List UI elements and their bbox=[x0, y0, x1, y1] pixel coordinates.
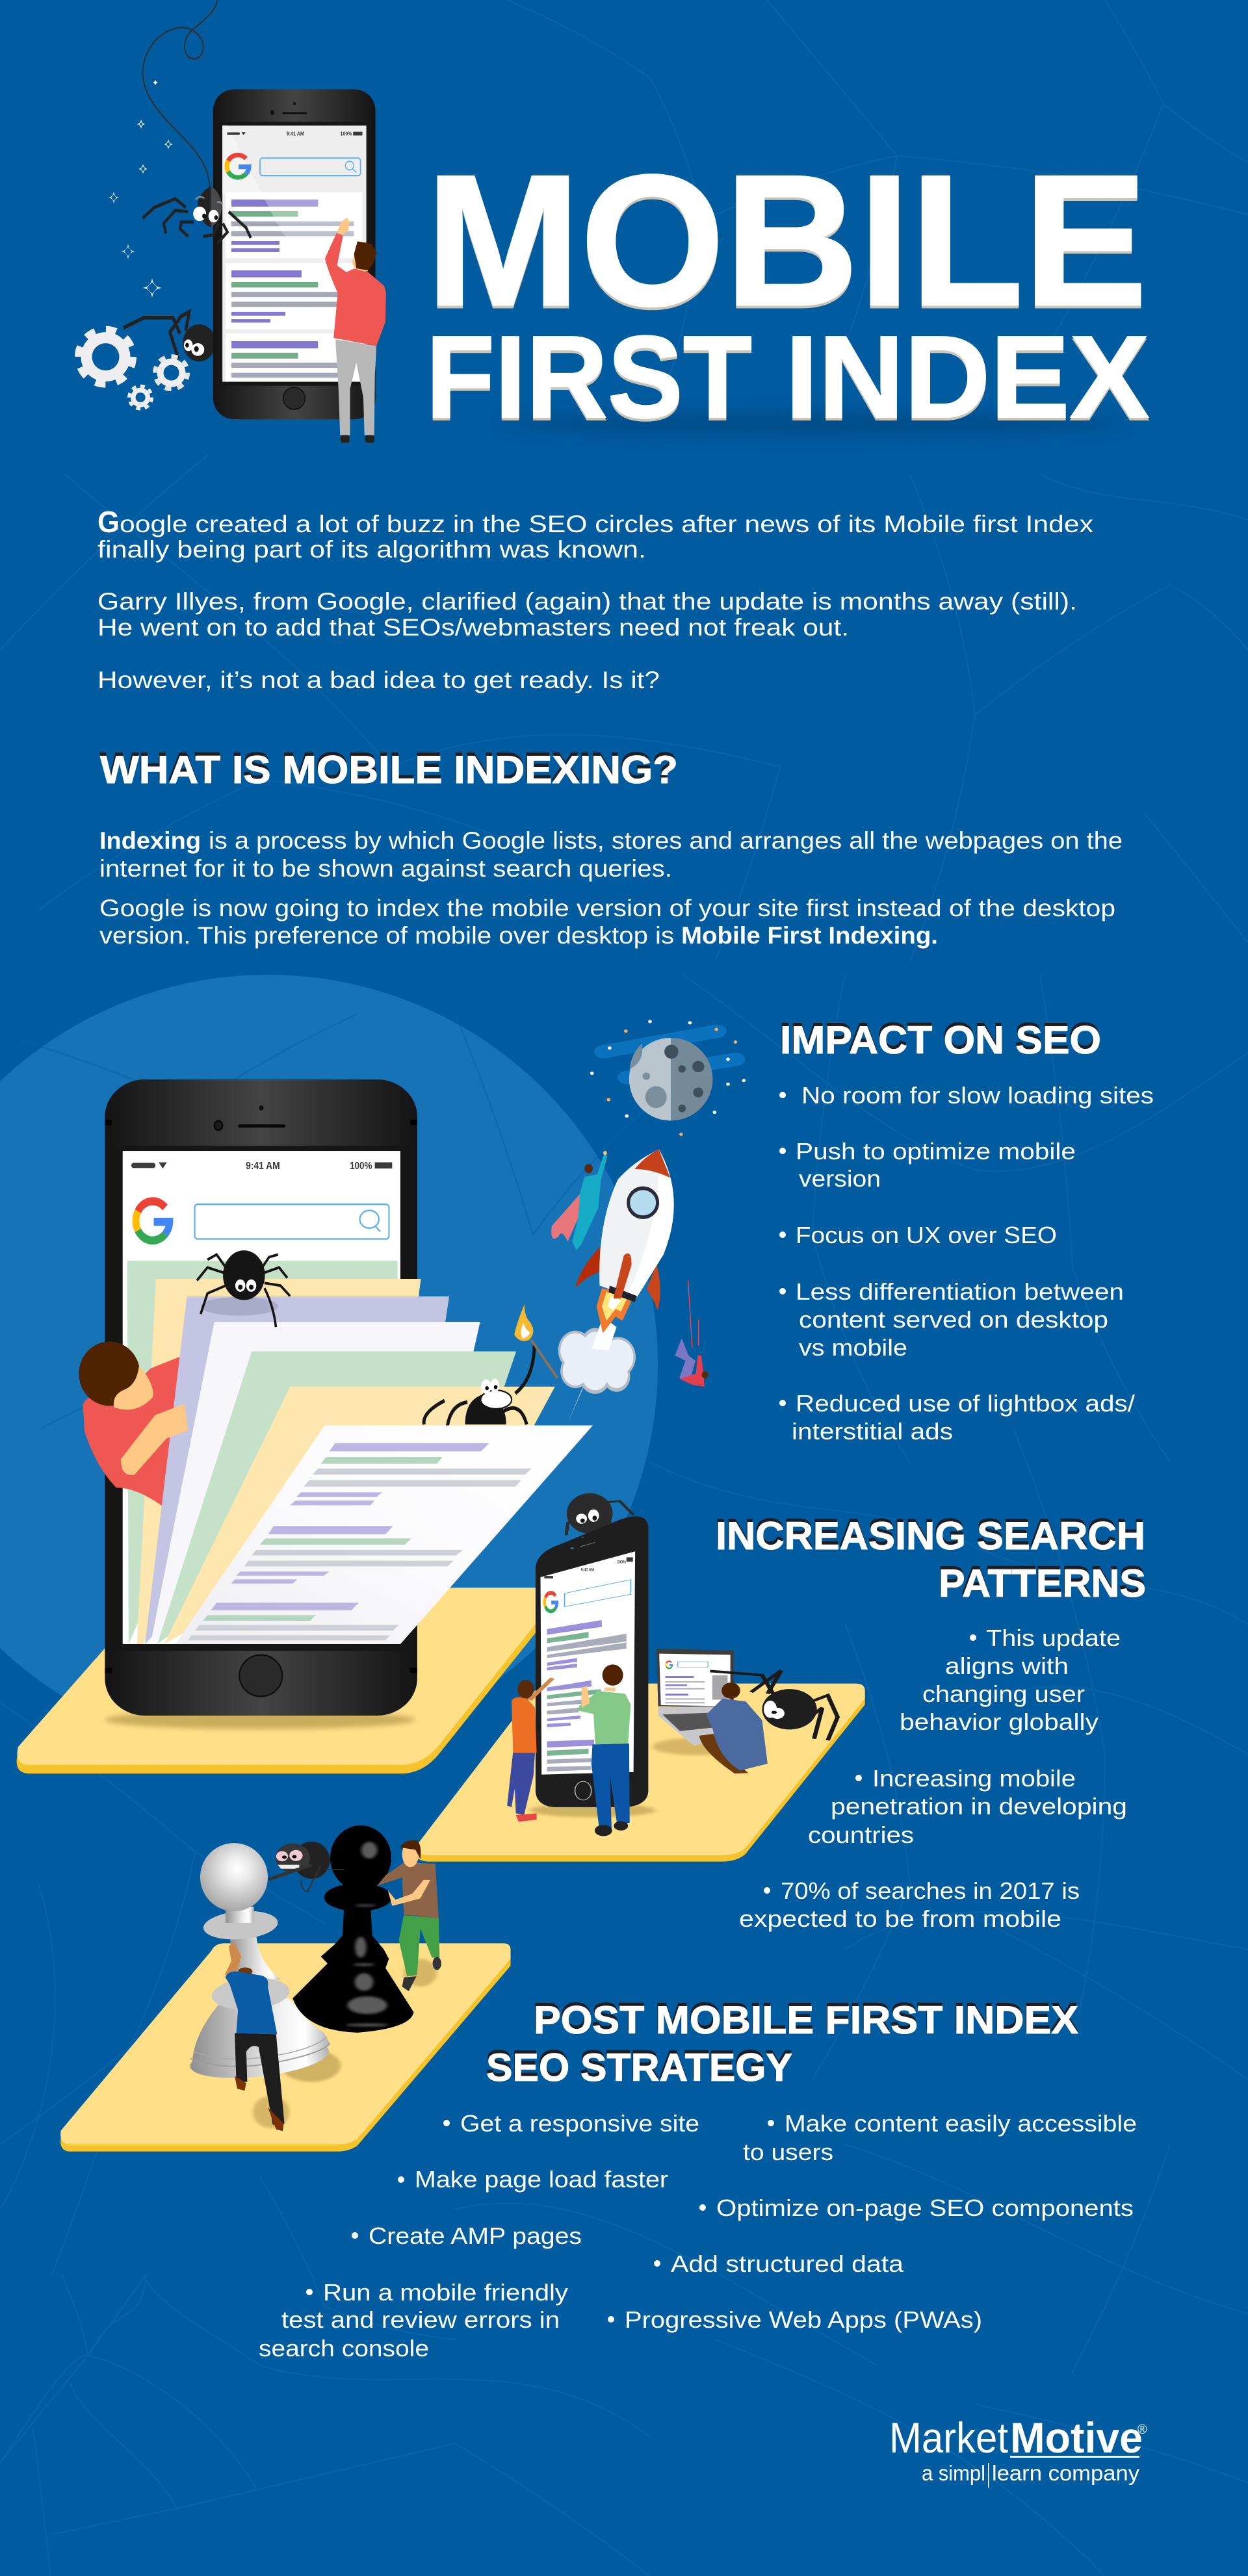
white pawn bbox=[186, 1843, 333, 2085]
back pages bbox=[127, 1261, 398, 1644]
intro text: However, it’s not a bad idea to get ready. Is it? bbox=[98, 667, 660, 693]
man in orange bbox=[507, 1678, 552, 1822]
definition text: Google is now going to index the mobile version of your site first instead of the desktop bbox=[99, 895, 1115, 921]
bullet list: strategy left: Create AMP pages bbox=[369, 2222, 582, 2249]
heading: increasing search patterns bbox=[716, 1514, 1146, 1605]
bullet list: impact: vs mobile bbox=[799, 1334, 907, 1361]
google logo bbox=[227, 155, 249, 177]
bullet list: strategy right: to users bbox=[743, 2139, 833, 2165]
status bar bbox=[131, 1160, 392, 1172]
bullet list: impact: interstitial ads bbox=[792, 1418, 953, 1445]
man pushing white pawn bbox=[225, 1942, 285, 2131]
illustration: main phone with indexed pages bbox=[17, 1079, 708, 1773]
falling person bbox=[675, 1280, 708, 1387]
upper spider bbox=[143, 187, 251, 244]
heading: increasing search patterns: PATTERNS bbox=[939, 1562, 1146, 1605]
yellow platform bbox=[60, 1943, 511, 2152]
result lines bbox=[188, 1443, 531, 1640]
search box bbox=[565, 1580, 630, 1606]
intro text: oogle created a lot of buzz in the SEO circles after news of its Mobile first Index bbox=[120, 511, 1094, 537]
logo: market motive: Market bbox=[889, 2414, 1008, 2462]
bullet list: search patterns: expected to be from mobile bbox=[739, 1905, 1061, 1932]
logo: market motive: Motive bbox=[1010, 2414, 1143, 2462]
heading: impact on seo: IMPACT ON SEO bbox=[780, 1018, 1101, 1062]
logo: market motive: a simpl bbox=[922, 2461, 985, 2485]
search results bbox=[226, 192, 362, 382]
logo: market motive: learn company bbox=[992, 2461, 1140, 2485]
rocket bbox=[575, 1150, 674, 1333]
status bar: 9:41 AM bbox=[246, 1160, 280, 1172]
bullet list: search patterns bbox=[739, 1625, 1127, 1932]
bullet list: strategy left: test and review errors in bbox=[281, 2306, 560, 2333]
man pushing black pawn bbox=[377, 1840, 441, 1991]
heading: post mobile first index seo strategy bbox=[486, 1998, 1078, 2089]
illustration: team around phone bbox=[417, 1493, 865, 1862]
bullet list: search patterns: behavior globally bbox=[900, 1708, 1098, 1735]
torch spider bbox=[424, 1304, 557, 1431]
phone body bbox=[536, 1516, 648, 1807]
lower spider bbox=[124, 312, 215, 361]
status bar bbox=[544, 1557, 633, 1578]
google logo bbox=[136, 1201, 170, 1241]
yellow platform bbox=[417, 1684, 865, 1862]
bullet list: impact: Reduced use of lightbox ads/ bbox=[796, 1390, 1135, 1417]
bullet list: strategy right bbox=[608, 2110, 1137, 2333]
man arm bbox=[121, 1404, 188, 1475]
bullet list: strategy right: Add structured data bbox=[671, 2250, 904, 2277]
phone top spider bbox=[566, 1493, 634, 1535]
bullet list: strategy left bbox=[259, 2110, 699, 2362]
phone screen bbox=[541, 1551, 635, 1775]
superhero bbox=[551, 1151, 607, 1250]
icon: moon with stars bbox=[590, 1020, 746, 1136]
title bbox=[426, 136, 1149, 443]
definition text: version. This preference of mobile over desktop is bbox=[99, 922, 674, 949]
logo: market motive bbox=[889, 2414, 1147, 2488]
heading: what is mobile indexing: WHAT IS MOBILE INDEXING? bbox=[100, 748, 678, 792]
title: MOBILE bbox=[426, 136, 1147, 344]
bullet list: strategy left: Get a responsive site bbox=[460, 2110, 699, 2137]
spider with stick bbox=[268, 1842, 344, 1892]
phone body bbox=[105, 1079, 417, 1716]
heading: post mobile first index seo strategy: SEO STRATEGY bbox=[486, 2046, 792, 2089]
title: FIRST bbox=[426, 312, 752, 443]
seated man bbox=[699, 1682, 768, 1773]
title shadow bbox=[500, 412, 1124, 435]
intro text: finally being part of its algorithm was known. bbox=[98, 536, 646, 563]
bullet list: strategy left: search console bbox=[259, 2335, 429, 2362]
bullet list: search patterns: countries bbox=[808, 1822, 914, 1848]
status bar: 100% bbox=[350, 1160, 372, 1172]
heading: increasing search patterns: INCREASING SEARCH bbox=[716, 1514, 1145, 1558]
yellow platform bbox=[17, 1588, 547, 1773]
bullet list: impact: Focus on UX over SEO bbox=[796, 1222, 1057, 1248]
search box bbox=[195, 1204, 389, 1239]
panel: increasing search patterns bbox=[716, 1514, 1146, 1932]
bullet list: strategy right: Optimize on-page SEO components bbox=[716, 2195, 1134, 2221]
smoke cloud bbox=[558, 1317, 636, 1423]
search box bbox=[260, 158, 361, 175]
definition text bbox=[99, 827, 1123, 949]
laptop bbox=[653, 1649, 740, 1755]
bullet list: strategy left: Make page load faster bbox=[415, 2166, 668, 2193]
bullet list: search patterns: This update bbox=[986, 1625, 1121, 1651]
phone screen bbox=[123, 1151, 400, 1644]
phone body bbox=[213, 90, 375, 419]
man in green bbox=[578, 1664, 630, 1836]
status bar bbox=[227, 131, 362, 137]
bullet list: impact: version bbox=[799, 1165, 881, 1192]
bullet list: search patterns: 70% of searches in 2017 is bbox=[781, 1877, 1080, 1904]
bullet list: search patterns: aligns with bbox=[945, 1653, 1069, 1679]
definition text: internet for it to be shown against search queries. bbox=[99, 855, 672, 882]
stacked pages bbox=[145, 1296, 449, 1644]
laptop spider bbox=[710, 1670, 838, 1740]
spider on pages bbox=[197, 1250, 290, 1327]
definition text: Indexing bbox=[99, 827, 201, 854]
status bar: 100% bbox=[617, 1560, 626, 1565]
icon: sparkles bbox=[109, 80, 173, 298]
bullet list: search patterns: changing user bbox=[922, 1681, 1085, 1707]
spider thread bbox=[143, 0, 217, 188]
bullet list: impact bbox=[779, 1082, 1154, 1445]
illustration: chess pawns bbox=[60, 1825, 511, 2152]
phone screen bbox=[222, 125, 367, 382]
heading: post mobile first index seo strategy: POST MOBILE FIRST INDEX bbox=[534, 1998, 1078, 2042]
logo: market motive: ® bbox=[1138, 2423, 1147, 2437]
front page bbox=[176, 1426, 593, 1644]
bullet list: strategy right: Progressive Web Apps (PWAs) bbox=[625, 2306, 982, 2333]
panel: impact on seo bbox=[779, 1018, 1154, 1445]
bullet list: strategy right: Make content easily accessible bbox=[785, 2110, 1137, 2137]
bullet list: impact: No room for slow loading sites bbox=[801, 1082, 1154, 1109]
gears bbox=[78, 329, 188, 409]
status bar: 9:41 AM bbox=[581, 1567, 594, 1573]
man peeking, body bbox=[79, 1341, 180, 1506]
status bar: 100% bbox=[341, 131, 352, 137]
intro text: Garry Illyes, from Google, clarified (again) that the update is months away (still). bbox=[98, 588, 1077, 615]
blue circle backdrop bbox=[0, 975, 658, 1755]
definition text: is a process by which Google lists, stores and arranges all the webpages on the bbox=[209, 827, 1123, 854]
panel: post mobile first index strategy bbox=[259, 1998, 1137, 2362]
status bar: 9:41 AM bbox=[287, 131, 304, 137]
bullet list: impact: Less differentiation between bbox=[796, 1278, 1124, 1305]
intro text bbox=[98, 505, 1094, 693]
black pawn bbox=[292, 1825, 414, 2033]
bullet list: strategy left: Run a mobile friendly bbox=[323, 2279, 568, 2306]
intro text: He went on to add that SEOs/webmasters need not freak out. bbox=[98, 614, 849, 641]
bullet list: impact: Push to optimize mobile bbox=[796, 1138, 1076, 1165]
google logo bbox=[545, 1593, 557, 1611]
bullet list: search patterns: penetration in developing bbox=[831, 1793, 1127, 1820]
illustration: header phone with spiders and gears bbox=[78, 0, 386, 443]
result bars bbox=[547, 1620, 627, 1771]
intro text: G bbox=[98, 505, 120, 539]
title: INDEX bbox=[785, 312, 1149, 443]
bullet list: search patterns: Increasing mobile bbox=[872, 1765, 1076, 1792]
definition text: Mobile First Indexing. bbox=[681, 922, 938, 949]
man in red sweater bbox=[325, 218, 386, 443]
bullet list: impact: content served on desktop bbox=[799, 1306, 1108, 1333]
